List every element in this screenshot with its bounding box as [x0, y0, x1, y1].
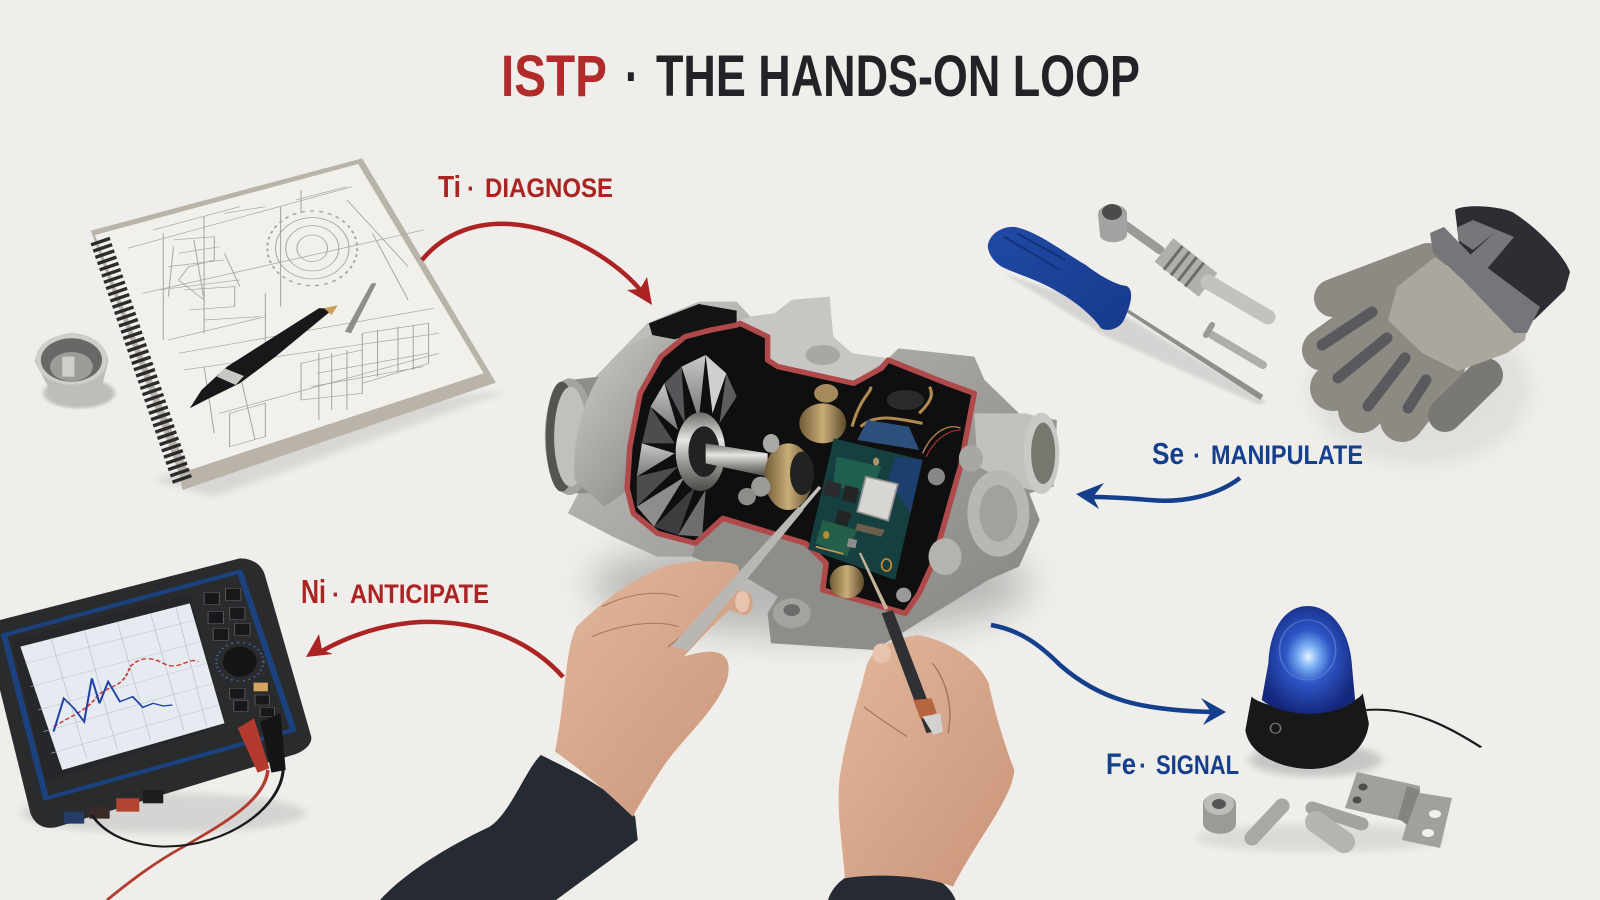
label: Ni anticipate	[301, 573, 489, 610]
side bolts	[959, 445, 983, 472]
screwdriver handle	[988, 227, 1131, 330]
spacer sleeve	[1203, 794, 1236, 834]
title: ·	[625, 44, 639, 109]
icon: work glove	[1310, 206, 1570, 465]
oscilloscope keypad	[204, 588, 274, 717]
test leads	[107, 770, 268, 900]
mechanical pencil	[345, 283, 377, 333]
main shaft	[706, 443, 768, 477]
arrow: Fe signal	[991, 625, 1226, 725]
label: Se manipulate: ·	[1193, 440, 1201, 470]
icon: socket tool and pin	[1098, 204, 1268, 365]
copper pipes and upper coil	[852, 387, 931, 427]
lower housing shade	[692, 518, 912, 650]
glove fingers	[1323, 262, 1486, 420]
oscilloscope body	[0, 558, 311, 828]
right outlet port	[974, 413, 1050, 493]
label: Ti diagnose: ·	[467, 173, 475, 203]
blue trim	[4, 572, 293, 798]
label: Fe signal: ·	[1139, 750, 1147, 780]
red dashed forecast trace	[54, 659, 198, 727]
label: Se manipulate: MANIPULATE	[1211, 440, 1363, 470]
beacon dome	[1262, 606, 1355, 714]
fingernail	[735, 591, 749, 612]
glove cuff band	[1430, 227, 1540, 333]
brass gears	[764, 443, 812, 510]
machine shadow	[590, 535, 1030, 635]
beacon base	[1245, 693, 1369, 769]
turbine hub	[676, 412, 725, 491]
oscilloscope screen	[20, 603, 224, 770]
label: Fe signal: SIGNAL	[1156, 750, 1239, 780]
icon: cutaway turbo mechanism	[545, 297, 1059, 650]
circuit board chips	[857, 477, 898, 521]
probe connectors	[238, 718, 269, 773]
label: Fe signal: Fe	[1106, 748, 1136, 781]
right hand and sleeve	[828, 610, 1014, 900]
angle bracket	[1345, 772, 1452, 848]
title: ISTP	[501, 44, 607, 109]
left hand and sleeve	[380, 507, 804, 900]
label: Ti diagnose: DIAGNOSE	[485, 173, 613, 203]
small pin	[1212, 335, 1263, 365]
icon: screwdriver	[988, 227, 1267, 405]
icon: notebook with blueprint sketches	[91, 158, 510, 497]
icon: loose fasteners and bracket	[1195, 772, 1452, 852]
label: Se manipulate	[1152, 436, 1363, 471]
right probe needle	[859, 553, 888, 610]
top casting	[740, 297, 888, 383]
blueprint sketch lines	[128, 187, 439, 447]
label: Ti diagnose	[438, 169, 613, 204]
glove dark finger patches	[1322, 312, 1426, 408]
screen grid	[26, 607, 219, 758]
label: Fe signal	[1106, 748, 1239, 781]
dark top cavity	[649, 304, 737, 339]
icon: notebook spiral binding	[100, 240, 183, 482]
precision driver	[882, 610, 939, 733]
oscilloscope display bezel	[11, 593, 224, 782]
notebook page	[95, 164, 484, 471]
blue measured trace	[54, 678, 172, 732]
arrow: Ti diagnose	[422, 224, 652, 305]
cutaway cavity with red rim	[627, 323, 974, 613]
label: Ni anticipate: ·	[332, 579, 340, 609]
pen	[190, 308, 334, 408]
label: Ni anticipate: Ni	[301, 573, 326, 610]
notebook cover and page block	[91, 158, 496, 490]
glove palm patch	[1388, 257, 1527, 371]
arrow: Se manipulate	[1076, 478, 1240, 509]
sleeve	[380, 755, 638, 900]
label: Ti diagnose: Ti	[438, 169, 461, 204]
glove cuff interior	[1455, 206, 1570, 320]
left flange	[570, 377, 599, 493]
icon: blue warning beacon	[1245, 606, 1481, 777]
socket head	[1098, 205, 1127, 242]
cap screws	[1312, 808, 1362, 824]
bottom ports	[64, 812, 84, 824]
hand	[555, 561, 753, 817]
oscilloscope knob	[216, 642, 263, 681]
housing body	[568, 297, 1057, 650]
hand	[839, 635, 1014, 887]
icon: oscilloscope	[0, 558, 311, 900]
stud pin	[1252, 806, 1282, 838]
label: Se manipulate: Se	[1152, 436, 1184, 471]
title	[501, 44, 1140, 109]
handheld probe	[671, 507, 804, 650]
volute front	[574, 328, 711, 507]
left probe needle	[738, 486, 821, 580]
beacon cable	[1366, 710, 1481, 747]
icon: metal cup	[35, 333, 115, 408]
title: THE HANDS-ON LOOP	[656, 44, 1140, 109]
turbine blades	[637, 355, 737, 537]
arrow: Ni anticipate	[306, 622, 563, 677]
label: Ni anticipate: ANTICIPATE	[350, 579, 489, 609]
screwdriver shaft	[1120, 308, 1263, 400]
circuit board	[808, 438, 923, 580]
sleeve	[828, 871, 956, 900]
